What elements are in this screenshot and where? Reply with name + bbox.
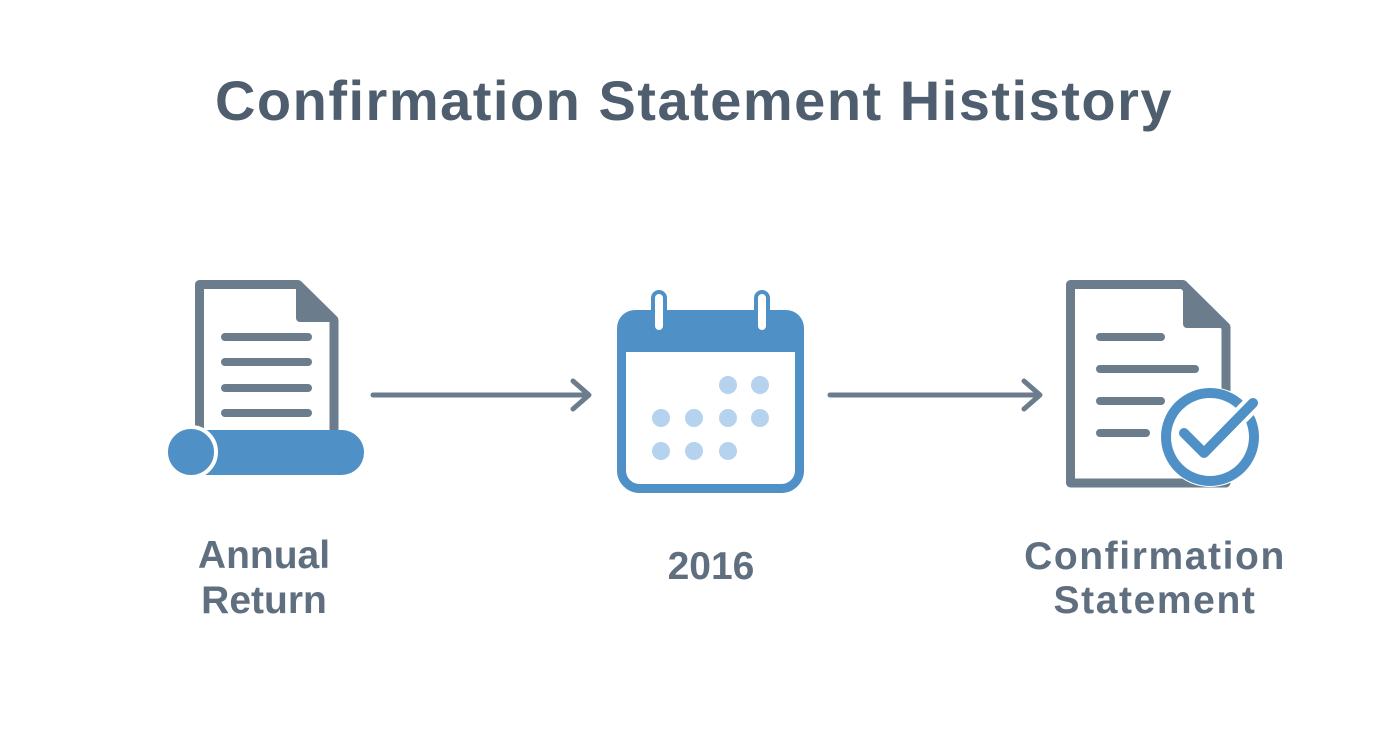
label: Annual Return: Return xyxy=(201,579,327,622)
label: Confirmation Statement xyxy=(1024,535,1286,622)
label: Confirmation Statement: Confirmation xyxy=(1024,535,1286,578)
icon: calendar xyxy=(617,292,804,488)
title: Confirmation Statement Hististory xyxy=(215,69,1173,132)
arrow 2 xyxy=(830,381,1040,409)
icon: annual return document with scroll xyxy=(166,281,364,477)
label: Confirmation Statement: Statement xyxy=(1054,579,1256,622)
arrow 1 xyxy=(373,381,589,409)
label: 2016: 2016 xyxy=(668,545,754,588)
label: Annual Return: Annual xyxy=(198,534,330,577)
label: Annual Return xyxy=(198,534,330,622)
icon: confirmation statement document with check xyxy=(1070,281,1260,487)
